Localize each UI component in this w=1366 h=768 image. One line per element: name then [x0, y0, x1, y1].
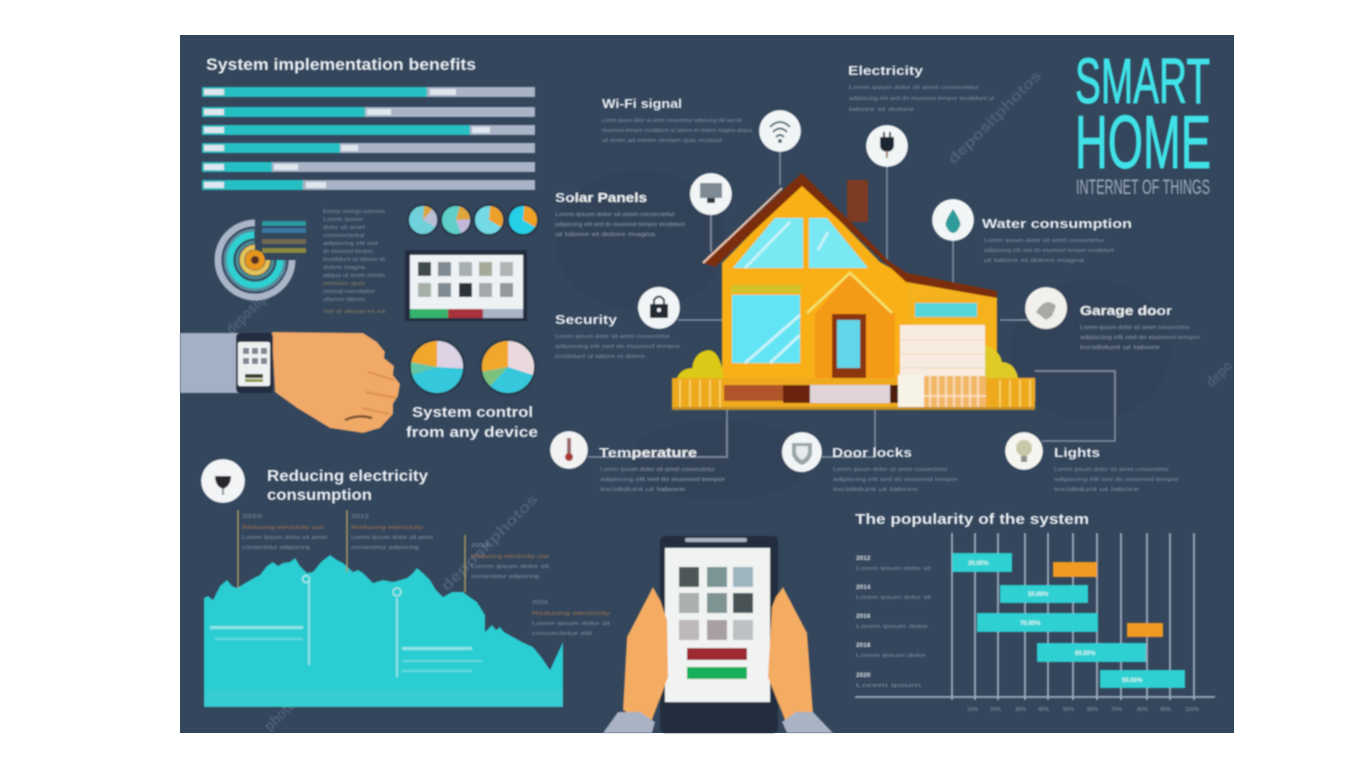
- label: wi-fi signal: ut enim ad minim veniam quis nostrud: [602, 138, 722, 144]
- text block: radial chart notes: dolor sit amet: [323, 225, 366, 231]
- label: garage door: Lorem ipsum dolor sit amet consectetur: [1080, 325, 1190, 331]
- icon: lights: [1005, 432, 1043, 470]
- main window: [732, 295, 800, 363]
- label: wi-fi signal: [602, 96, 752, 144]
- garage window: [915, 303, 977, 317]
- label: lights: incididunt ut labore: [1054, 487, 1139, 493]
- label: solar panels: adipiscing elit sed do eiusmod tempor incididunt: [555, 222, 686, 228]
- text block: radial chart notes: dolore magna: [323, 265, 365, 271]
- label: electricity: Lorem ipsum dolor sit amet consectetur: [849, 85, 979, 91]
- callouts on area chart: consectetur elit: [532, 631, 593, 637]
- label: door locks: [832, 445, 958, 493]
- callouts on area chart: Lorem ipsum dolor sit: [532, 621, 611, 627]
- label: water consumption: adipiscing elit sed do eiusmod tempor incididunt: [984, 248, 1115, 254]
- icon: door lock: [782, 432, 822, 472]
- icon: temperature: [550, 431, 588, 469]
- callouts on area chart: Reducing electricity: [532, 611, 611, 617]
- label: garage door: adipiscing elit sed do eiusmod tempor: [1080, 335, 1200, 341]
- text block: radial chart notes: nostrud exercitation: [323, 289, 375, 295]
- label: wi-fi signal: eiusmod tempor incididunt ut labore et dolore magna aliqua: [602, 128, 752, 134]
- label: temperature: [599, 445, 725, 493]
- label: door locks: Lorem ipsum dolor sit amet consectetur: [833, 467, 948, 473]
- tablet dashboard mini panel: [405, 250, 527, 321]
- bar chart: benefits: [202, 87, 535, 190]
- label: temperature: incididunt ut labore: [600, 487, 685, 493]
- garage wall: [900, 278, 997, 390]
- gantt chart: popularity: 60.00%: [1075, 651, 1096, 657]
- title: smart home: SMART: [1075, 45, 1210, 117]
- text block: radial chart notes: Lorem ipsum: [323, 217, 363, 223]
- label: lights: Lorem ipsum dolor sit amet consectetur: [1054, 467, 1169, 473]
- text block: radial chart notes: adipiscing elit sed: [323, 241, 378, 247]
- gantt chart: popularity: 50%: [1063, 707, 1074, 713]
- gantt chart: popularity: 70%: [1111, 707, 1122, 713]
- text block: radial chart notes: nisi ut aliquip ex ea: [323, 309, 385, 315]
- gantt chart: popularity: Lorem ipsum dolor: [856, 653, 927, 659]
- gantt chart: popularity: 40%: [1038, 707, 1049, 713]
- label: wi-fi signal: Wi-Fi signal: [602, 96, 682, 111]
- label: garage door: [1080, 303, 1200, 351]
- label: security: Security: [555, 312, 618, 327]
- heading: reducing electricity: Reducing electricity: [267, 468, 428, 485]
- gantt chart: popularity: 100%: [1185, 707, 1199, 713]
- chimney: [847, 180, 868, 222]
- door: [832, 314, 866, 384]
- callouts on area chart: consectetur adipiscing: [471, 574, 539, 580]
- watermarks: depositphotos: [438, 491, 542, 595]
- watermarks: [223, 67, 1236, 735]
- callouts on area chart: [238, 510, 611, 637]
- garage door: [900, 325, 985, 405]
- heading: popularity of the system: The popularity of the system: [855, 511, 1089, 528]
- callouts on area chart: 2016: [532, 600, 548, 606]
- label: temperature: adipiscing elit sed do eiusmod tempor: [600, 477, 725, 483]
- gantt chart: popularity: 2016: [856, 613, 871, 620]
- text block: radial chart notes: do eiusmod tempor: [323, 249, 373, 255]
- gantt chart: popularity: Lorem ipsum dolor sit: [856, 595, 932, 601]
- connector lines: [588, 150, 1115, 457]
- callouts on area chart: 2010: [242, 514, 262, 520]
- icon: hands holding tablet: [603, 536, 833, 733]
- icon: house illustration: [672, 173, 1035, 410]
- heading: system control: System control: [412, 405, 533, 421]
- label: temperature: Temperature: [599, 445, 697, 460]
- label: water consumption: ut labore et dolore magna: [984, 258, 1084, 264]
- gantt chart: popularity: 30%: [1015, 707, 1026, 713]
- main roof: [703, 173, 997, 298]
- callouts on area chart: 2014: [471, 543, 489, 549]
- four small pie charts: [407, 204, 539, 236]
- gantt chart: popularity: 2020: [856, 672, 871, 679]
- gantt chart: popularity: 70.00%: [1020, 621, 1041, 627]
- callouts on area chart: Reducing electricity use: [471, 554, 549, 560]
- icon: sleeve and hand with smartwatch: [180, 332, 400, 433]
- pie chart: right device control: [480, 339, 536, 395]
- gantt chart: popularity: Lorem ipsum: [856, 683, 921, 689]
- gantt chart: popularity: 50.00%: [1028, 592, 1049, 598]
- icon: water drop: [932, 199, 974, 241]
- area chart: electricity consumption: [204, 555, 563, 707]
- title: smart home: [1075, 45, 1211, 199]
- text block: radial chart notes: incididunt ut labore et: [323, 257, 386, 263]
- heading: system control: from any device: [406, 425, 538, 441]
- wall band: [731, 285, 801, 293]
- icon: solar panel: [690, 173, 732, 215]
- watermarks: depositphotos: [945, 67, 1045, 168]
- label: solar panels: Solar Panels: [555, 190, 647, 205]
- gantt chart: popularity: 2014: [856, 584, 871, 591]
- gantt chart: popularity: 90%: [1160, 707, 1171, 713]
- icon: electricity savings: [201, 459, 245, 503]
- callouts on area chart: 2012: [351, 514, 369, 520]
- watermarks: depo: [1203, 358, 1236, 391]
- label: garage door: Garage door: [1080, 303, 1172, 318]
- label: lights: Lights: [1054, 445, 1100, 460]
- callouts on area chart: consectetur adipiscing: [351, 545, 419, 551]
- label: electricity: Electricity: [848, 63, 924, 78]
- world map background shading: [555, 170, 1170, 500]
- text block: radial chart notes: [323, 209, 386, 315]
- label: electricity: adipiscing elit sed do eiusmod tempor incididunt ut: [849, 96, 995, 102]
- label: solar panels: ut labore et dolore magna: [555, 232, 655, 238]
- title: smart home: HOME: [1075, 100, 1211, 184]
- gantt chart: popularity: 2012: [856, 555, 871, 562]
- text block: radial chart notes: veniam quis: [323, 281, 366, 287]
- label: wi-fi signal: Lorem ipsum dolor sit amet consectetur adipiscing elit sed do: [602, 118, 742, 124]
- attic windows: [733, 218, 803, 268]
- callouts on area chart: Lorem ipsum dolor sit amet: [351, 535, 434, 541]
- radial chart: [218, 223, 292, 297]
- label: garage door: incididunt ut labore: [1080, 345, 1160, 351]
- label: security: Lorem ipsum dolor sit amet consectetur: [555, 334, 670, 340]
- callouts on area chart: Lorem ipsum dolor sit amet: [242, 535, 328, 541]
- text block: radial chart notes: aliqua ut enim minim: [323, 273, 385, 279]
- label: water consumption: Lorem ipsum dolor sit amet consectetur: [984, 238, 1104, 244]
- watermarks: photos: [261, 691, 305, 735]
- label: solar panels: [555, 190, 686, 238]
- label: door locks: incididunt ut labore: [833, 487, 918, 493]
- text block: radial chart notes: ullamco laboris: [323, 297, 366, 303]
- label: security: adipiscing elit sed do eiusmod tempor: [555, 344, 680, 350]
- heading: system control: [406, 405, 538, 441]
- gantt chart: popularity: 50.00%: [1122, 678, 1143, 684]
- pie chart: left device control: [409, 339, 465, 395]
- gantt chart: popularity: 10%: [967, 707, 978, 713]
- watermarks: depositphotos: [223, 266, 295, 338]
- poster content: [180, 45, 1236, 735]
- heading: system implementation benefits: System implementation benefits: [206, 55, 476, 74]
- label: lights: [1054, 445, 1179, 493]
- label: temperature: Lorem ipsum dolor sit amet consectetur: [600, 467, 715, 473]
- label: water consumption: Water consumption: [982, 216, 1132, 231]
- label: door locks: Door locks: [832, 445, 912, 460]
- text block: radial chart notes: Energy savings overview: [323, 209, 385, 215]
- bushes: [675, 350, 724, 384]
- main wall: [722, 182, 908, 385]
- porch: [815, 273, 895, 384]
- label: water consumption: [982, 216, 1132, 264]
- callouts on area chart: consectetur adipiscing: [242, 545, 310, 551]
- gantt chart: popularity: 60%: [1087, 707, 1098, 713]
- gantt chart: popularity: 80%: [1137, 707, 1148, 713]
- gantt chart: popularity: [855, 533, 1215, 713]
- text block: radial chart notes: consectetur: [323, 233, 366, 239]
- label: security: [555, 312, 680, 360]
- icon: wi-fi: [759, 110, 801, 152]
- panel: dark navy background: [180, 35, 1234, 733]
- radial chart legend: [262, 221, 306, 253]
- label: electricity: labore et dolore: [849, 107, 914, 113]
- icon: electricity plug: [866, 125, 908, 167]
- label: lights: adipiscing elit sed do eiusmod tempor: [1054, 477, 1179, 483]
- label: solar panels: Lorem ipsum dolor sit amet consectetur: [555, 212, 675, 218]
- gantt chart: popularity: 30.00%: [968, 561, 989, 567]
- heading: reducing electricity: consumption: [267, 487, 372, 504]
- label: electricity: [848, 63, 995, 113]
- fence base: [672, 378, 900, 410]
- gantt chart: popularity: Lorem ipsum dolor: [856, 624, 929, 630]
- heading: reducing electricity: [267, 468, 428, 504]
- gantt chart: popularity: Lorem ipsum dolor sit: [856, 566, 932, 572]
- callouts on area chart: Lorem ipsum dolor sit: [471, 564, 550, 570]
- gantt chart: popularity: 20%: [990, 707, 1001, 713]
- callouts on area chart: Reducing electricity: [351, 525, 424, 531]
- label: door locks: adipiscing elit sed do eiusmod tempor: [833, 477, 958, 483]
- icon: security lock: [638, 287, 680, 329]
- title: smart home: INTERNET OF THINGS: [1076, 176, 1210, 199]
- icon: garage door: [1025, 287, 1067, 329]
- label: security: incididunt ut labore et dolore: [555, 354, 645, 360]
- gantt chart: popularity: 2018: [856, 642, 871, 649]
- callouts on area chart: Reducing electricity use: [242, 525, 324, 531]
